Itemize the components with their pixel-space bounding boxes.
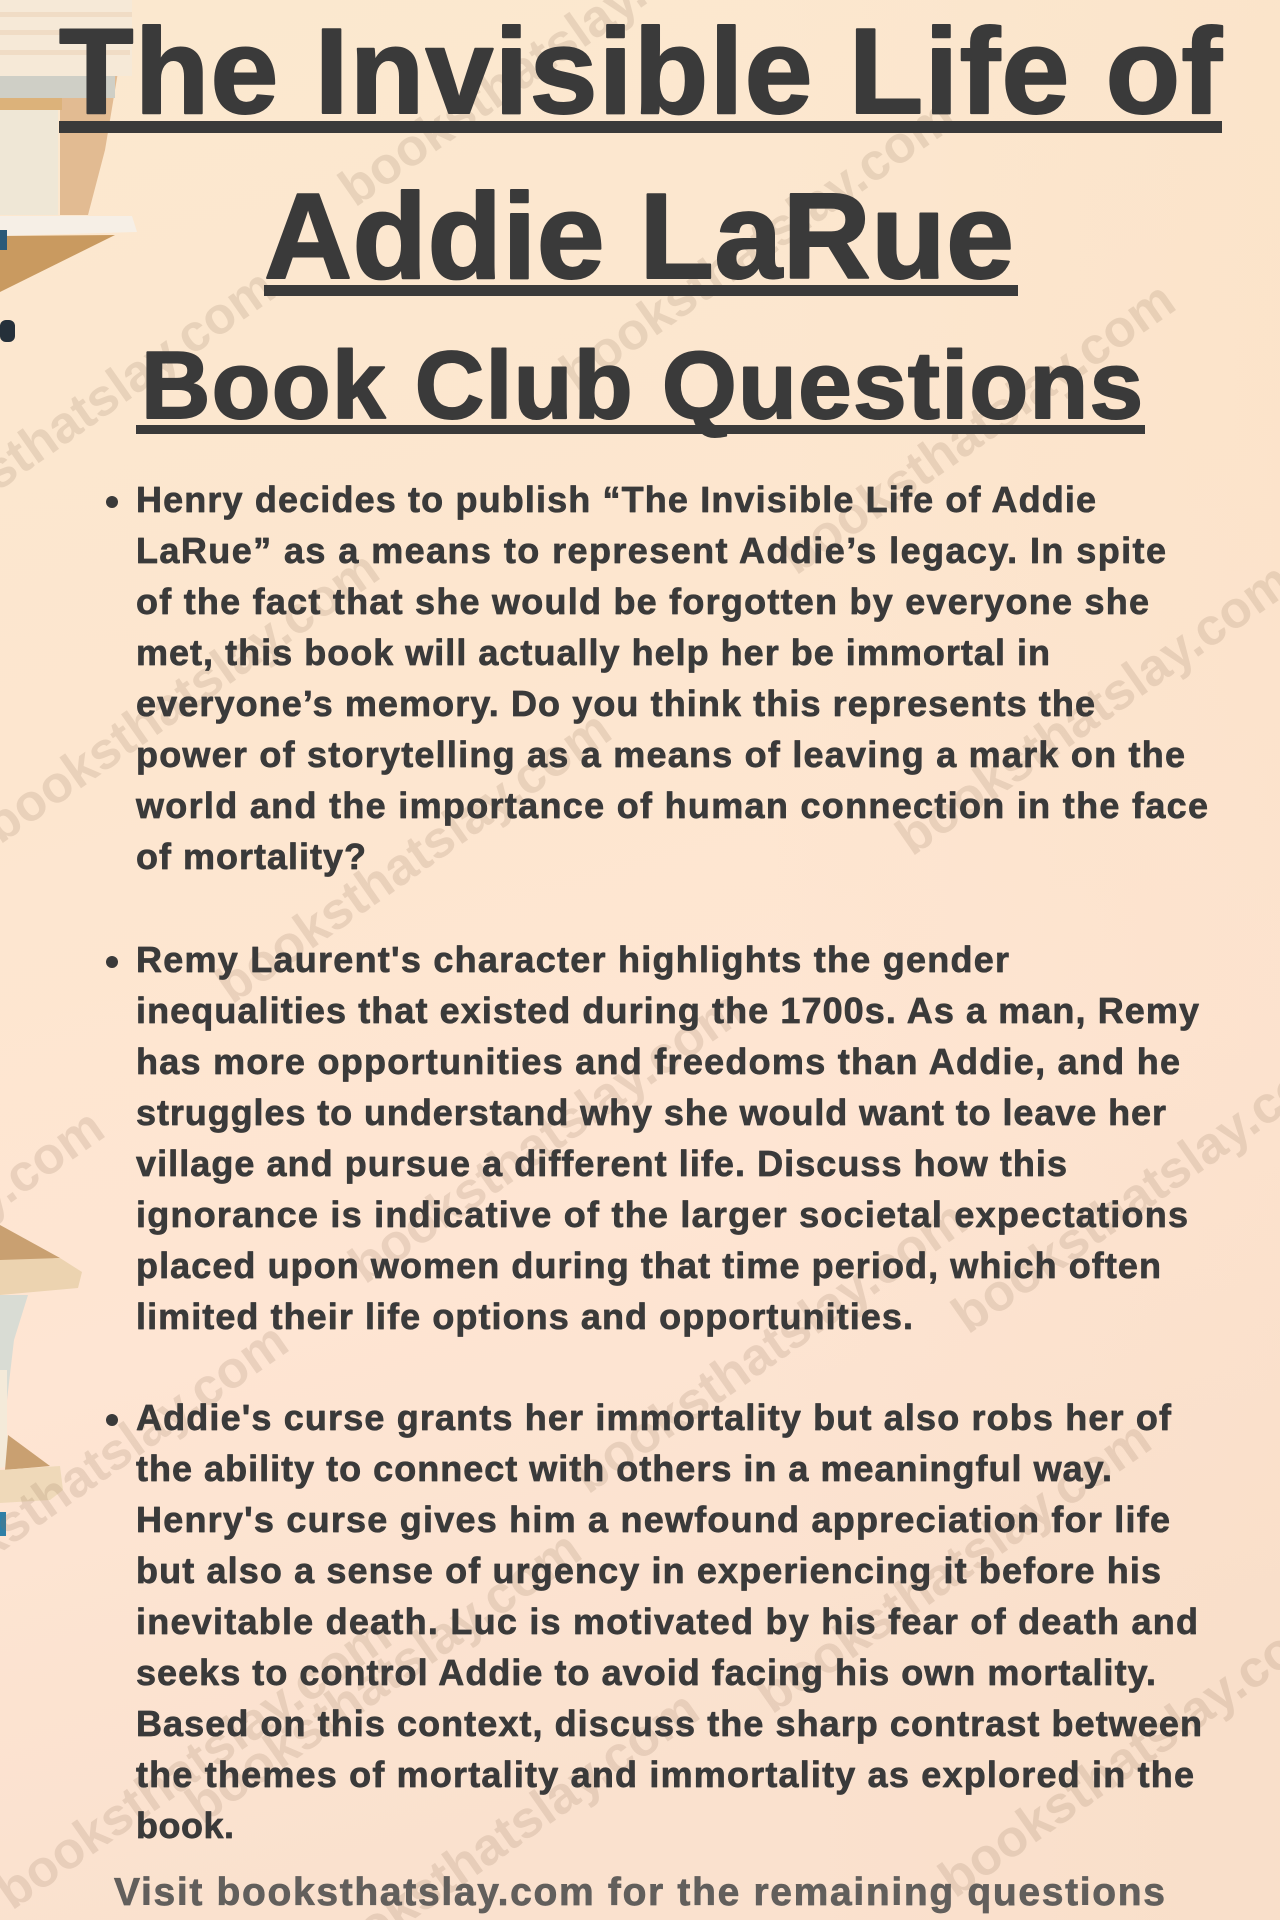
- question 1: everyone’s memory. Do you think this represents the: [136, 683, 1095, 724]
- question 2: has more opportunities and freedoms than Addie, and he: [136, 1041, 1180, 1082]
- question 3: but also a sense of urgency in experiencing it before his: [136, 1550, 1161, 1591]
- watermarks: booksthatslay.com: [562, 1189, 978, 1505]
- question 1: LaRue” as a means to represent Addie’s legacy. In spite: [136, 530, 1166, 571]
- question 2: village and pursue a different life. Discuss how this: [136, 1143, 1067, 1184]
- title: [59, 3, 1222, 439]
- title line 1: The Invisible Life of: [59, 3, 1222, 139]
- title line 2: Addie LaRue: [264, 168, 1014, 304]
- question 2: struggles to understand why she would want to leave her: [136, 1092, 1166, 1133]
- question 3: Henry's curse gives him a newfound appreciation for life: [136, 1499, 1170, 1540]
- question 2: inequalities that existed during the 1700s. As a man, Remy: [136, 990, 1199, 1031]
- illustration: stacked books lower left: [0, 1225, 82, 1536]
- question 1: met, this book will actually help her be immortal in: [136, 632, 1050, 673]
- watermarks: booksthatslay.com: [550, 86, 966, 402]
- subtitle: Book Club Questions: [141, 332, 1143, 439]
- footer call to action: Visit booksthatslay.com for the remaining questions: [114, 1871, 1165, 1914]
- question 2: limited their life options and opportunities.: [136, 1296, 913, 1337]
- watermarks: booksthatslay.com: [176, 1519, 592, 1835]
- question 1: power of storytelling as a means of leaving a mark on the: [136, 734, 1185, 775]
- watermarks: booksthatslay.com: [746, 1409, 1162, 1725]
- question 2: placed upon women during that time period, which often: [136, 1245, 1161, 1286]
- illustration: stacked books top left: [0, 0, 137, 342]
- question 3: Addie's curse grants her immortality but also robs her of: [136, 1397, 1172, 1438]
- question 1: of the fact that she would be forgotten by everyone she: [136, 581, 1149, 622]
- question 3: the ability to connect with others in a meaningful way.: [136, 1448, 1112, 1489]
- question 2: Remy Laurent's character highlights the gender: [136, 939, 1009, 980]
- question 2: ignorance is indicative of the larger societal expectations: [136, 1194, 1188, 1235]
- question 1: [106, 479, 1208, 877]
- question 3: Based on this context, discuss the sharp contrast between: [136, 1703, 1202, 1744]
- watermarks: booksthatslay.com: [770, 270, 1186, 586]
- question 1: Henry decides to publish “The Invisible Life of Addie: [136, 479, 1096, 520]
- question 1: world and the importance of human connection in the face: [135, 785, 1208, 826]
- question 1: of mortality?: [136, 836, 366, 877]
- watermarks: booksthatslay.com: [339, 979, 755, 1295]
- question 3: inevitable death. Luc is motivated by his fear of death and: [136, 1601, 1198, 1642]
- question 3: book.: [136, 1805, 234, 1846]
- question 3: [106, 1397, 1202, 1846]
- question 2: [106, 939, 1199, 1337]
- question 3: the themes of mortality and immortality as explored in the: [136, 1754, 1194, 1795]
- question 3: seeks to control Addie to avoid facing his own mortality.: [136, 1652, 1156, 1693]
- watermarks: booksthatslay.com: [206, 699, 622, 1015]
